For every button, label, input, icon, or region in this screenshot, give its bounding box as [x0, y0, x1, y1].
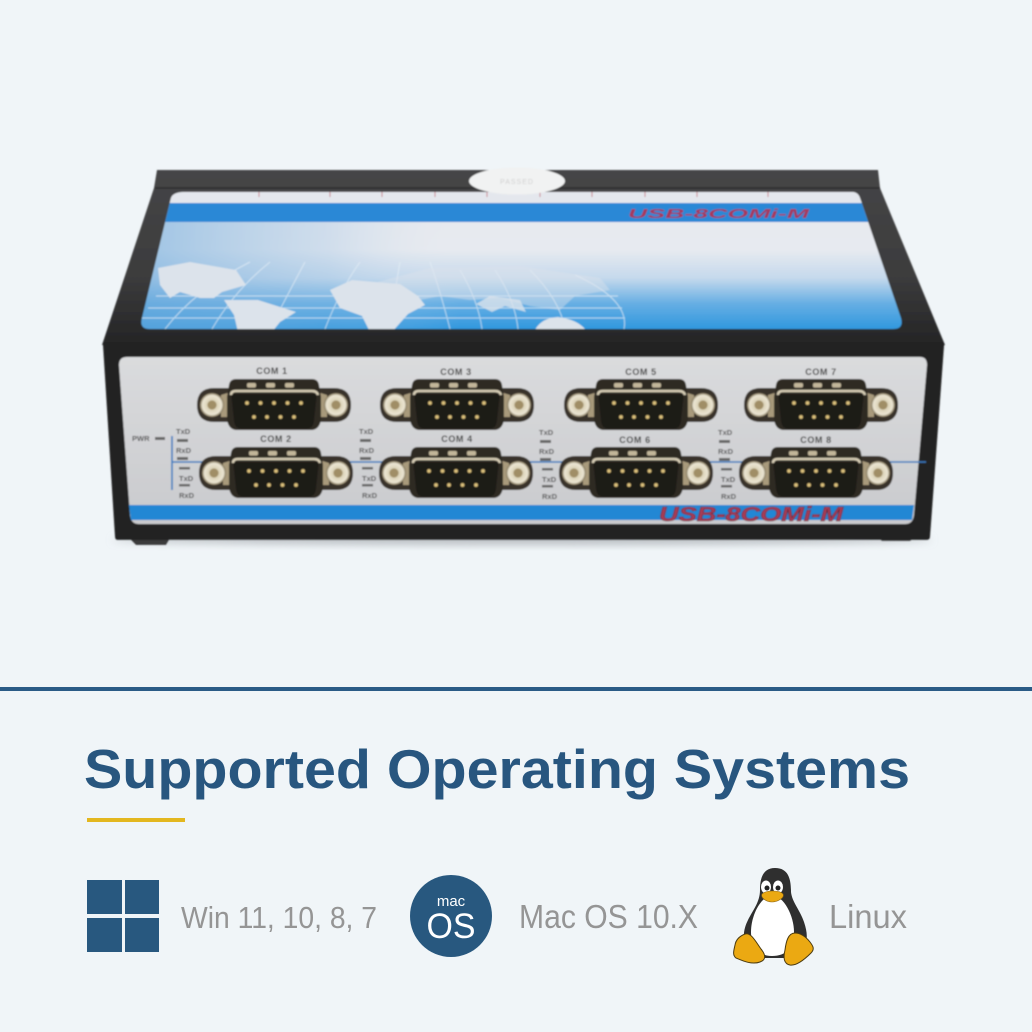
circuit line — [172, 436, 926, 490]
ground shadow — [112, 535, 932, 545]
windows label: Win 11, 10, 8, 7 — [181, 900, 377, 935]
serial connectors — [197, 379, 898, 498]
indicator strip — [178, 191, 855, 198]
label base — [135, 190, 910, 332]
COM port labels — [256, 366, 837, 445]
icon: windows — [87, 880, 159, 952]
section divider — [0, 687, 1032, 691]
mac label: Mac OS 10.X — [519, 898, 698, 935]
infographic canvas — [0, 169, 1032, 966]
model name on top: USB-8COMi-M — [628, 206, 811, 221]
top casing — [102, 170, 945, 345]
title accent rule — [87, 818, 185, 822]
product photo: 8-port USB to serial hub — [102, 168, 945, 545]
front frame — [103, 342, 944, 540]
white cap sticker — [469, 168, 565, 194]
power indicator — [132, 434, 165, 443]
front panel — [119, 357, 927, 524]
TxD RxD indicators — [176, 427, 737, 501]
bottom blue band — [129, 505, 914, 520]
COM port labels: COM 4 — [441, 434, 473, 444]
COM port labels: COM 5 — [625, 367, 657, 377]
world map continents — [158, 262, 610, 332]
globe grid — [142, 262, 625, 329]
top label with world map — [135, 190, 910, 332]
top fold line — [155, 187, 880, 189]
COM port labels: COM 1 — [256, 366, 288, 376]
icon: macOS — [410, 875, 492, 957]
white cap sticker: PASSED — [500, 179, 534, 186]
COM port labels: COM 2 — [260, 434, 292, 444]
COM port labels: COM 8 — [800, 435, 832, 445]
COM port labels: COM 7 — [805, 367, 837, 377]
power indicator: PWR — [132, 434, 150, 443]
title: Supported Operating Systems — [84, 738, 910, 800]
blue stripe — [135, 203, 910, 222]
model name on front: USB-8COMi-M — [659, 504, 845, 526]
icon: macOS: OS — [426, 907, 476, 946]
rubber feet — [126, 535, 918, 545]
icon: linux penguin — [734, 868, 813, 965]
linux label: Linux — [829, 898, 907, 935]
COM port labels: COM 3 — [440, 367, 472, 377]
COM port labels: COM 6 — [619, 435, 651, 445]
icon: macOS: mac — [437, 893, 466, 910]
halftone fade — [140, 220, 440, 330]
